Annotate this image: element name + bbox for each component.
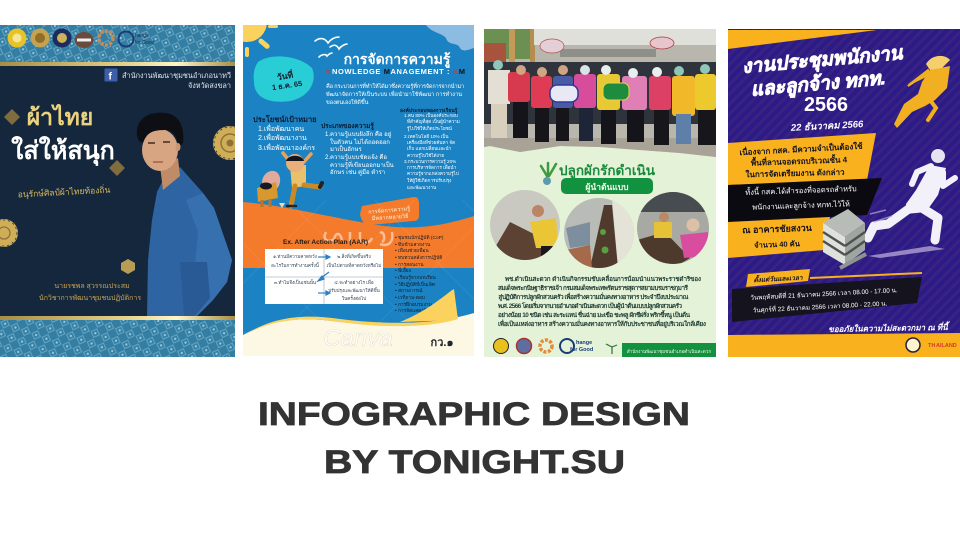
process column: 3.กระบวนการความรู้ 20%	[404, 159, 456, 165]
location block yellow	[728, 217, 830, 258]
footer logos	[494, 338, 593, 354]
location block yellow: ณ อาคารชัยสงวน	[742, 223, 813, 235]
title: INFOGRAPHIC DESIGN	[258, 396, 690, 432]
poster title: งานประชุมพนักงาน	[741, 43, 904, 79]
process column: ความรู้จากแหล่งความรู้ไป	[407, 170, 459, 177]
photo circle 2	[564, 198, 634, 268]
birds	[315, 37, 347, 57]
title	[258, 396, 690, 480]
knowledge types: 2.ความรู้แบบชัดแจ้ง คือ	[325, 153, 387, 161]
learning methods list: • การสอนงาน	[395, 262, 424, 268]
logo row: hange	[135, 33, 149, 39]
process column: เครื่องมือที่ช่วยค้นหา จัด	[407, 139, 455, 145]
author credit: นักวิชาการพัฒนาชุมชนปฏิบัติการ	[39, 294, 141, 302]
process column: ความรู้ไปใช้ได้ง่าย	[407, 152, 444, 159]
panel: vegetable garden poster	[484, 29, 716, 357]
AAR table: ๓.ทำไมจึงเป็นเช่นนั้น	[274, 278, 317, 285]
footer logos: TH	[928, 343, 935, 349]
yellow and cream footer waves	[243, 289, 474, 356]
knowledge types: ประเภทของความรู้	[321, 121, 374, 131]
process column: 1.คน 80% เป็นองค์ประกอบ	[404, 111, 458, 118]
portrait of man in blue shirt	[137, 113, 232, 316]
apology line: ขออภัยในความไม่สะดวกมา ณ ที่นี้	[828, 321, 950, 334]
knowledge types: มาเป็นอักษร	[330, 144, 362, 153]
callout: การจัดการความรู้	[368, 205, 410, 216]
process column	[400, 107, 460, 190]
garden paragraph: เพื่อเป็นแหล่งอาหาร สร้างความมั่นคงทางอาหารให้กับประชาชนที่อยู่บริเวณใกล้เคียง	[498, 319, 706, 329]
cloud	[426, 25, 474, 50]
panel: knowledge management poster	[243, 25, 474, 356]
process column: องค์ประกอบของการเรียนรู้	[400, 107, 458, 115]
gold ornaments	[0, 109, 247, 274]
yellow runner	[894, 56, 950, 128]
knowledge types: 1.ความรู้แบบฝังลึก คือ อยู่	[325, 130, 391, 138]
learning methods list: • ทบทวนหลังการปฏิบัติ	[395, 255, 442, 261]
notice block yellow: ในการจัดเตรียมงาน ดังกล่าว	[745, 167, 845, 179]
footer sprout and office bar: สำนักงานพัฒนาชุมชนอำเภอดำเนินสะดวก	[627, 348, 711, 355]
orange wave	[243, 202, 474, 268]
callout	[360, 197, 419, 225]
process column: ที่สำคัญที่สุด เป็นผู้นำความ	[407, 117, 460, 125]
facebook credit: จังหวัดสงขลา	[188, 81, 231, 90]
AAR heading: Ex. After Action Plan (AAR)	[283, 239, 368, 246]
knowledge types: อักษร เช่น คู่มือ ตำรา	[330, 168, 385, 176]
schedule label	[746, 269, 922, 287]
AAR table: อะไรในการทำงานครั้งนี้	[271, 262, 320, 268]
poster title: 22 ธันวาคม 2566	[790, 119, 864, 134]
top yellow strip	[728, 30, 877, 49]
gold rules	[0, 62, 235, 320]
garden paragraph: อย่างน้อย 10 ชนิด เช่น สะระแหน่ ชื่นฉ่าย มะเขือ ชะพลู ผักชีฝรั่ง พริกขี้หนู เป็นต้น	[498, 309, 691, 320]
knowledge types: ความรู้ที่เขียนออกมาเป็น	[330, 160, 394, 169]
learning methods list: • การจัดแสดงนิทรรศ	[395, 308, 438, 314]
AAR table: ในครั้งต่อไป	[342, 295, 366, 301]
schedule box	[732, 277, 922, 322]
learning methods list: • เวทีถาม-ตอบ	[395, 294, 425, 301]
AAR table: ๔.จะทำอย่างไร เพื่อ	[334, 279, 374, 285]
photo circle 3	[637, 192, 709, 264]
benefits list: ประโยชน์/เป้าหมาย	[253, 114, 317, 124]
poster title: ใส่ให้สนุก	[11, 135, 115, 167]
garden heading: ผู้นำต้นแบบ	[585, 182, 629, 193]
bottom yellow strip	[728, 333, 960, 357]
garden paragraph: พ.ศ. 2566 โดยเริ่มจากนายอำเภอดำเนินสะดวก เป็นผู้นำต้นแบบปลูกผักสวนครัว	[498, 301, 682, 311]
placards	[540, 37, 674, 102]
AAR table	[265, 249, 383, 304]
definition text	[326, 82, 464, 106]
author credit: นายรชพล สุวรรณประสม	[54, 283, 130, 290]
garden heading	[541, 163, 656, 194]
title: BY TONIGHT.SU	[324, 444, 625, 480]
process column: และพัฒนางาน	[407, 184, 437, 190]
learning methods list: • ทีมข้ามสายงาน	[395, 241, 431, 248]
learning methods list: • เพื่อนช่วยเพื่อน	[395, 247, 429, 254]
garden paragraph: สู่ปฏิบัติการปลูกผักสวนครัว เพื่อสร้างความมั่นคงทางอาหาร ประจำปีงบประมาณ	[498, 292, 689, 302]
poster title: ผ้าไทย	[27, 103, 93, 130]
AAR table: ๒.สิ่งที่เกิดขึ้นจริง	[337, 253, 371, 259]
poster title: อนุรักษ์ศิลป์ผ้าไทยท้องถิ่น	[17, 184, 111, 200]
process column: การบริหารจัดการ เพื่อนำ	[407, 164, 457, 170]
building illustration	[823, 209, 866, 268]
learning methods list: • เรียนรู้จากบทเรียน	[395, 274, 437, 281]
logo row: for Good	[135, 40, 155, 46]
learning methods list	[395, 235, 444, 314]
process column: 2.เทคโนโลยี 10% เป็น	[404, 132, 449, 139]
knowledge types	[321, 121, 394, 176]
panel: staff meeting poster	[728, 29, 960, 357]
author credit	[39, 283, 141, 302]
poster title	[11, 103, 115, 200]
benefits list	[253, 114, 317, 152]
group photo	[484, 29, 716, 160]
faint watermark strokes on orange band	[325, 232, 392, 245]
process column: ให้ผู้ใช้เกิดการปรับปรุง	[407, 177, 451, 184]
notice block black	[728, 178, 882, 222]
heading: การจัดการความรู้	[344, 51, 451, 68]
dark centre panel	[0, 66, 235, 316]
poster title	[741, 43, 904, 134]
schedule label: ตั้งแต่วันและเวลา	[753, 272, 803, 284]
benefits list: 2.เพื่อพัฒนางาน	[258, 133, 307, 142]
garden paragraph: พช.ดำเนินสะดวก ดำเนินกิจกรรมขับเคลื่อนการน้อมนำแนวพระราชดำริของ	[505, 274, 701, 283]
facebook credit: สำนักงานพัฒนาชุมชนอำเภอนาทวี	[122, 71, 231, 80]
notice block yellow: พื้นที่ลานจอดรถบริเวณชั้น 4	[751, 153, 848, 168]
facebook credit	[104, 68, 231, 90]
white runner	[868, 149, 955, 258]
children illustration	[257, 153, 322, 208]
Canva watermark: Canva	[323, 325, 393, 352]
learning methods list: • วิธีปฏิบัติที่เป็นเลิศ	[395, 280, 435, 288]
learning methods list: • การฝึกอบรมงาน	[395, 302, 433, 308]
definition text: ของตนเองให้ดีขึ้น	[326, 98, 369, 106]
garden paragraph	[498, 274, 706, 329]
AAR table: ๑.ท่านมีความคาดหวัง	[273, 253, 317, 259]
AAR table: ปรับปรุงและพัฒนาให้ดีขึ้น	[328, 287, 381, 294]
notice block yellow	[728, 133, 876, 185]
notice block black: พนักงานและลูกจ้าง ทกท.ไว้ให้	[752, 199, 850, 212]
AAR table: เป็นไปตามที่คาดหวังหรือไม่	[327, 261, 381, 268]
knowledge types: ในตัวคน ไม่ได้ถอดออก	[330, 138, 390, 146]
notice block yellow: เนื่องจาก กสค. มีความจำเป็นต้องใช้	[739, 140, 863, 157]
learning methods list: • สถานการณ์	[395, 287, 423, 294]
footer logos: hange	[576, 340, 592, 346]
notice block black: ทั้งนี้ กสค.ได้สำรองที่จอดรถสำหรับ	[745, 183, 857, 197]
garden heading: ปลูกผักรักดำเนิน	[559, 163, 656, 179]
footer logos	[906, 338, 957, 352]
logo row	[8, 28, 155, 48]
heading: KNOWLEDGE MANAGEMENT : KM	[326, 67, 465, 76]
poster title: 2566	[804, 94, 848, 116]
definition text: คือ กระบวนการที่ทำให้ได้มาซึ่งความรู้ที่การจัดการจากนำมา	[326, 82, 464, 90]
schedule box: วันพฤหัสบดีที่ 21 ธันวาคม 2566 เวลา 08.00 - 17.00 น.	[750, 285, 898, 302]
photo circle 1	[490, 190, 562, 262]
facebook credit: f	[108, 72, 112, 82]
poster title: และลูกจ้าง ทกท.	[750, 67, 887, 102]
footer logos: for Good	[570, 347, 593, 353]
sun	[243, 25, 278, 57]
location block yellow: จำนวน 40 คัน	[754, 239, 801, 250]
page code: กว.๑	[431, 337, 453, 349]
learning methods list: • ชุมชนนักปฏิบัติ (CoP)	[395, 235, 444, 241]
definition text: พัฒนาจัดการให้เป็นระบบ เพื่อนำมาใช้พัฒนา การทำงาน	[326, 90, 462, 98]
panel: Thai fabric poster	[0, 25, 247, 357]
people	[488, 60, 716, 145]
heading	[326, 52, 464, 74]
date badge: วันที่	[276, 68, 294, 82]
process column: เก็บ แลกเปลี่ยนและนำ	[407, 144, 452, 151]
date badge: 1 ธ.ค. 65	[271, 79, 303, 92]
date badge	[254, 56, 314, 102]
diagonal watermark grid	[243, 200, 474, 334]
footer sprout and office bar	[606, 343, 716, 357]
footer logos: AILAND	[936, 343, 957, 349]
callout: มีหลากหลายวิธี	[371, 213, 409, 222]
schedule box: วันศุกร์ที่ 22 ธันวาคม 2566 เวลา 08.00 - 22.00 น.	[753, 298, 888, 315]
process column: รู้ไปใช้ให้เกิดประโยชน์	[407, 125, 453, 132]
learning methods list: • พี่เลี้ยง	[395, 266, 411, 274]
benefits list: 3.เพื่อพัฒนาองค์กร	[258, 143, 315, 152]
garden paragraph: สมเด็จพระกนิษฐาธิราชเจ้า กรมสมเด็จพระเทพรัตนราชสุดาฯสยามบรมราชกุมารี	[498, 283, 689, 292]
benefits list: 1.เพื่อพัฒนาคน	[258, 124, 304, 133]
